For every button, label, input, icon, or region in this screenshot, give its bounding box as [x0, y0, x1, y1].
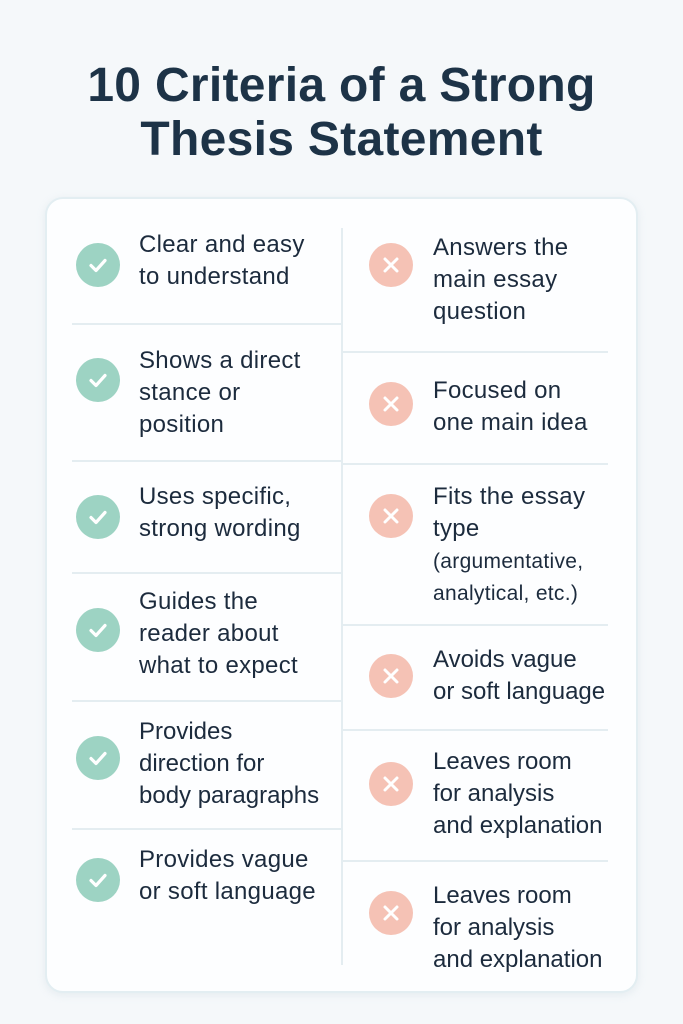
text: right 2 [433, 377, 588, 436]
text: right 4 [433, 646, 605, 705]
text: right 1: question [433, 298, 526, 325]
panel: criteria card [45, 197, 638, 993]
text: left 4: what to expect [139, 652, 298, 679]
text: right 6 [433, 882, 602, 973]
text: left 4 [139, 588, 298, 679]
title [87, 59, 596, 166]
text: left 1: Clear and easy [139, 231, 305, 258]
icon: check 2 [76, 358, 120, 402]
text: left 1: to understand [139, 263, 290, 290]
text: right 3: Fits the essay [433, 483, 585, 510]
text: left 4: reader about [139, 620, 279, 647]
text: left 5: body paragraphs [139, 782, 319, 809]
text: left 3: strong wording [139, 515, 301, 542]
icon: cross 5 [369, 762, 413, 806]
text: right 4: Avoids vague [433, 646, 577, 673]
text: left 6 [139, 846, 316, 905]
icon: check 6 [76, 858, 120, 902]
icon: cross 4 [369, 654, 413, 698]
text: right 3: type [433, 515, 480, 542]
icon: cross 2 [369, 382, 413, 426]
icon: check 3 [76, 495, 120, 539]
text: left 3: Uses specific, [139, 483, 291, 510]
text: left 5: Provides [139, 718, 232, 745]
text: left 3 [139, 483, 301, 542]
text: left 1 [139, 231, 305, 290]
icon: check 5 [76, 736, 120, 780]
icon: cross 3 [369, 494, 413, 538]
text: left 5 [139, 718, 319, 809]
text: right 1: main essay [433, 266, 557, 293]
text: left 2: stance or [139, 379, 240, 406]
text: right 6: Leaves room [433, 882, 572, 909]
text: right 5: and explanation [433, 812, 602, 839]
text: right 1: Answers the [433, 234, 568, 261]
text: left 6: or soft language [139, 878, 316, 905]
icon: check 1 [76, 243, 120, 287]
text: left 6: Provides vague [139, 846, 309, 873]
text: left 4: Guides the [139, 588, 258, 615]
text: right 4: or soft language [433, 678, 605, 705]
text: right 1 [433, 234, 568, 325]
text: left 5: direction for [139, 750, 264, 777]
text: left 2: Shows a direct [139, 347, 301, 374]
text: right 5 [433, 748, 602, 839]
icon: cross 1 [369, 243, 413, 287]
text: right 6: and explanation [433, 946, 602, 973]
text: right 3 [433, 483, 585, 605]
icon: check 4 [76, 608, 120, 652]
text: right 3: analytical, etc.) [433, 582, 578, 605]
title: Thesis Statement [140, 113, 543, 166]
text: right 5: Leaves room [433, 748, 572, 775]
text: right 2: one main idea [433, 409, 588, 436]
text: left 2: position [139, 411, 224, 438]
text: right 5: for analysis [433, 780, 554, 807]
text: right 2: Focused on [433, 377, 561, 404]
title: 10 Criteria of a Strong [87, 59, 596, 112]
text: right 3: (argumentative, [433, 550, 583, 573]
text: right 6: for analysis [433, 914, 554, 941]
text: left 2 [139, 347, 301, 438]
icon: cross 6 [369, 891, 413, 935]
